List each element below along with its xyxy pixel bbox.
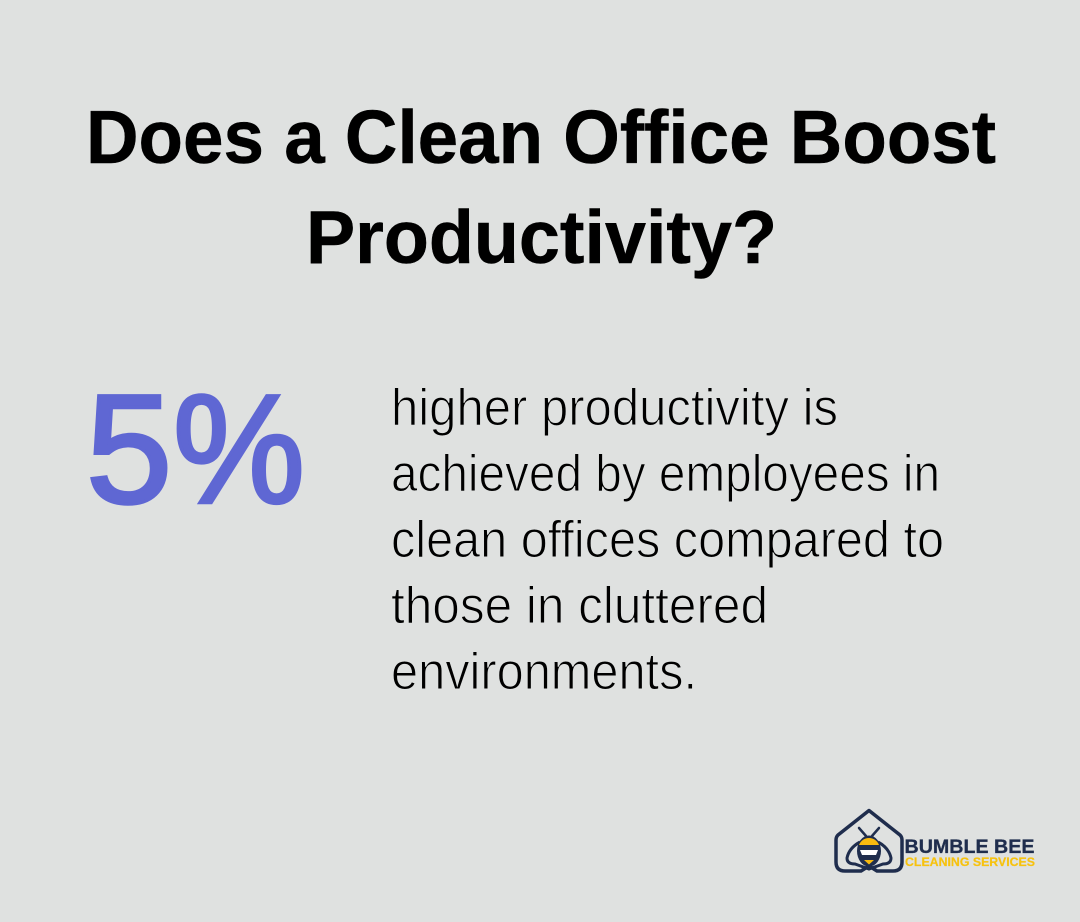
description text: clean offices compared to [391, 510, 944, 568]
title [86, 95, 996, 279]
description text: those in cluttered [391, 576, 768, 634]
icon: bee [847, 828, 891, 869]
big statistic: 5%: % [173, 362, 305, 536]
icon: house outline [836, 810, 902, 871]
logo wordmark: BUMBLE BEE [904, 837, 1034, 858]
title: Does a Clean Office Boost [86, 95, 996, 179]
big statistic: 5% [86, 362, 305, 536]
description text: achieved by employees in [391, 444, 940, 502]
description text: higher productivity is [391, 378, 838, 436]
description text: environments. [391, 642, 697, 700]
logo tagline: CLEANING SERVICES [905, 855, 1035, 869]
big statistic: 5%: 5 [86, 362, 172, 536]
title: Productivity? [306, 195, 777, 279]
logo: Bumble Bee Cleaning Services [836, 810, 1035, 871]
description text [391, 378, 944, 700]
